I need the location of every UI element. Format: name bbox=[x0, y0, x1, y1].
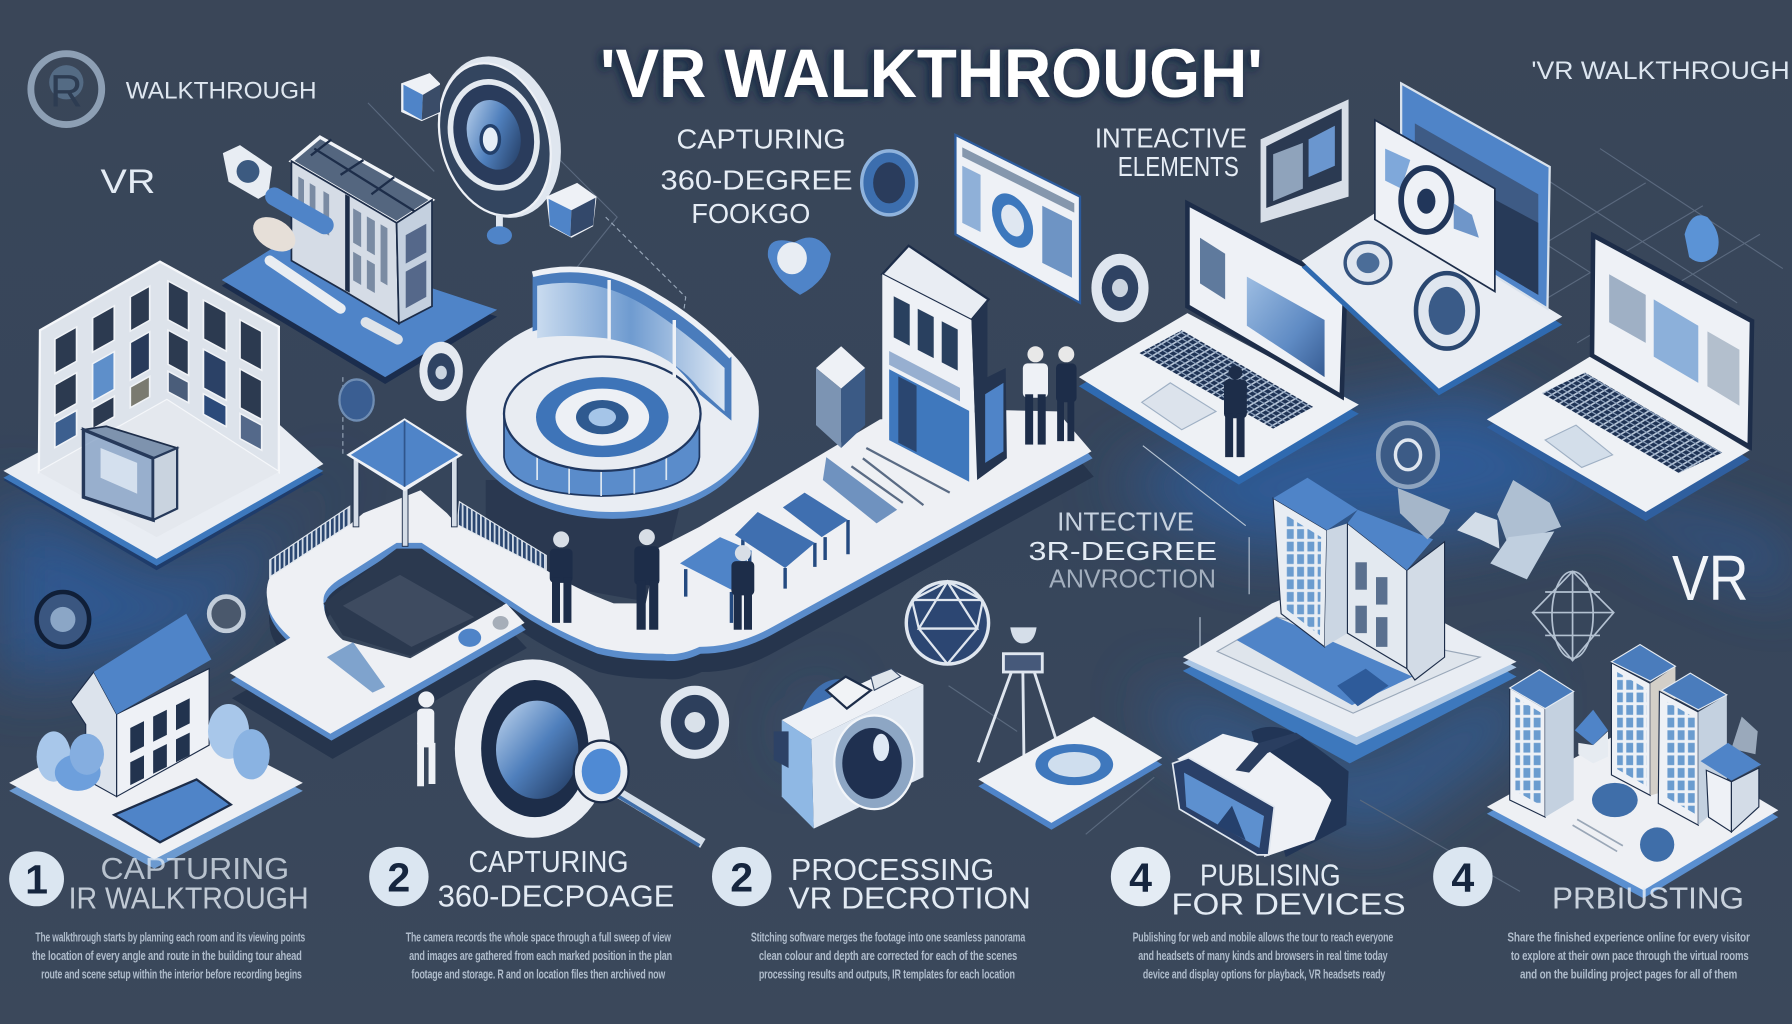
central building bbox=[882, 246, 1007, 482]
step 2: The camera records the whole space through a full sweep of view bbox=[406, 930, 672, 945]
step 3: PROCESSING bbox=[791, 852, 994, 887]
label interactive elements bbox=[1095, 122, 1247, 182]
floating interface panel bbox=[955, 135, 1080, 303]
magnifier and lens bbox=[455, 659, 703, 846]
wireframe globe bbox=[1533, 571, 1614, 661]
person silhouette bbox=[417, 691, 435, 786]
white plate with blue disc bbox=[978, 717, 1162, 830]
label interactive navigation: 3R-DEGREE bbox=[1029, 536, 1217, 566]
step 3: processing results and outputs, IR templates for each location bbox=[759, 966, 1015, 981]
label capturing footage: FOOKGO bbox=[691, 198, 810, 229]
step 1: IR WALKTROUGH bbox=[69, 881, 309, 916]
step 1: the location of every angle and route in the building tour ahead bbox=[32, 948, 302, 963]
step 5 bbox=[1433, 847, 1750, 981]
label capturing footage: CAPTURING bbox=[677, 124, 846, 155]
step 4: FOR DEVICES bbox=[1171, 886, 1406, 921]
step 4: Publishing for web and mobile allows the tour to reach everyone bbox=[1133, 930, 1393, 945]
step 2: 2 bbox=[387, 854, 410, 900]
label VR right: VR bbox=[1672, 542, 1749, 614]
step 5: PRBIUSTING bbox=[1552, 881, 1744, 916]
label capturing footage bbox=[661, 124, 853, 229]
label capturing footage: 360-DEGREE bbox=[661, 165, 853, 196]
logo badge bbox=[31, 54, 102, 125]
laptop one bbox=[1079, 203, 1359, 485]
step 3: 2 bbox=[730, 854, 753, 900]
step 1: CAPTURING bbox=[101, 851, 289, 886]
frame building on white platform bbox=[3, 262, 323, 570]
large building on platform bbox=[1183, 478, 1517, 763]
step 2: and images are gathered from each marked position in the plan bbox=[409, 948, 672, 963]
faint grid lines upper right bbox=[343, 103, 1783, 891]
rear blue screen and white panel platform bbox=[1302, 83, 1562, 395]
step 4 bbox=[1111, 847, 1406, 981]
label VR left: VR bbox=[101, 163, 155, 201]
step 4: and headsets of many kinds and browsers in real time today bbox=[1138, 948, 1388, 963]
brand label: WALKTHROUGH bbox=[126, 77, 317, 104]
step 2: 360-DECPOAGE bbox=[438, 878, 674, 913]
step 2: footage and storage. R and on location files then archived now bbox=[411, 966, 666, 981]
step 1: 1 bbox=[25, 857, 48, 903]
step 5: 4 bbox=[1451, 854, 1474, 900]
floating rock shapes bbox=[1398, 480, 1561, 579]
label interactive navigation: ANVROCTION bbox=[1049, 563, 1216, 593]
label interactive navigation bbox=[1029, 506, 1217, 593]
step 4: device and display options for playback, VR headsets ready bbox=[1143, 966, 1386, 981]
geodesic sphere bbox=[906, 582, 989, 664]
VR headset bbox=[1173, 727, 1349, 857]
step 4: 4 bbox=[1129, 854, 1152, 900]
step 3: Stitching software merges the footage into one seamless panorama bbox=[751, 930, 1026, 945]
step 1: route and scene setup within the interior before recording begins bbox=[41, 966, 302, 981]
small kiosk bbox=[816, 346, 865, 448]
step 1 bbox=[9, 851, 309, 981]
blue platform with tower bbox=[222, 137, 497, 384]
house with trees on platform bbox=[9, 614, 303, 869]
laptop three bbox=[1487, 235, 1752, 521]
small ring icons bbox=[37, 151, 1719, 759]
blue tables bbox=[680, 457, 897, 630]
step 1: The walkthrough starts by planning each room and its viewing points bbox=[35, 930, 305, 945]
camera bbox=[774, 669, 923, 829]
step 4: PUBLISING bbox=[1200, 858, 1341, 893]
gazebo bbox=[346, 418, 463, 546]
label interactive elements: INTEACTIVE bbox=[1095, 122, 1247, 153]
visitors on path bbox=[550, 346, 1077, 630]
turntable with panorama screen bbox=[466, 269, 759, 519]
walkway path bbox=[230, 410, 1094, 759]
step 3 bbox=[712, 847, 1031, 981]
small dark screen bbox=[1261, 99, 1349, 223]
large lens icon bbox=[401, 42, 597, 245]
step 3: VR DECROTION bbox=[789, 881, 1031, 916]
step 2: CAPTURING bbox=[469, 844, 629, 879]
logo badge: R bbox=[50, 65, 83, 116]
city towers on platform bbox=[1487, 645, 1778, 898]
label top right: 'VR WALKTHROUGH bbox=[1531, 57, 1790, 85]
title: 'VR WALKTHROUGH' bbox=[600, 35, 1263, 112]
label interactive elements: ELEMENTS bbox=[1118, 151, 1239, 182]
label interactive navigation: INTECTIVE bbox=[1057, 506, 1194, 536]
step 2 bbox=[369, 844, 674, 981]
tripod bbox=[978, 627, 1056, 763]
step 3: clean colour and depth are corrected for each of the scenes bbox=[759, 948, 1017, 963]
